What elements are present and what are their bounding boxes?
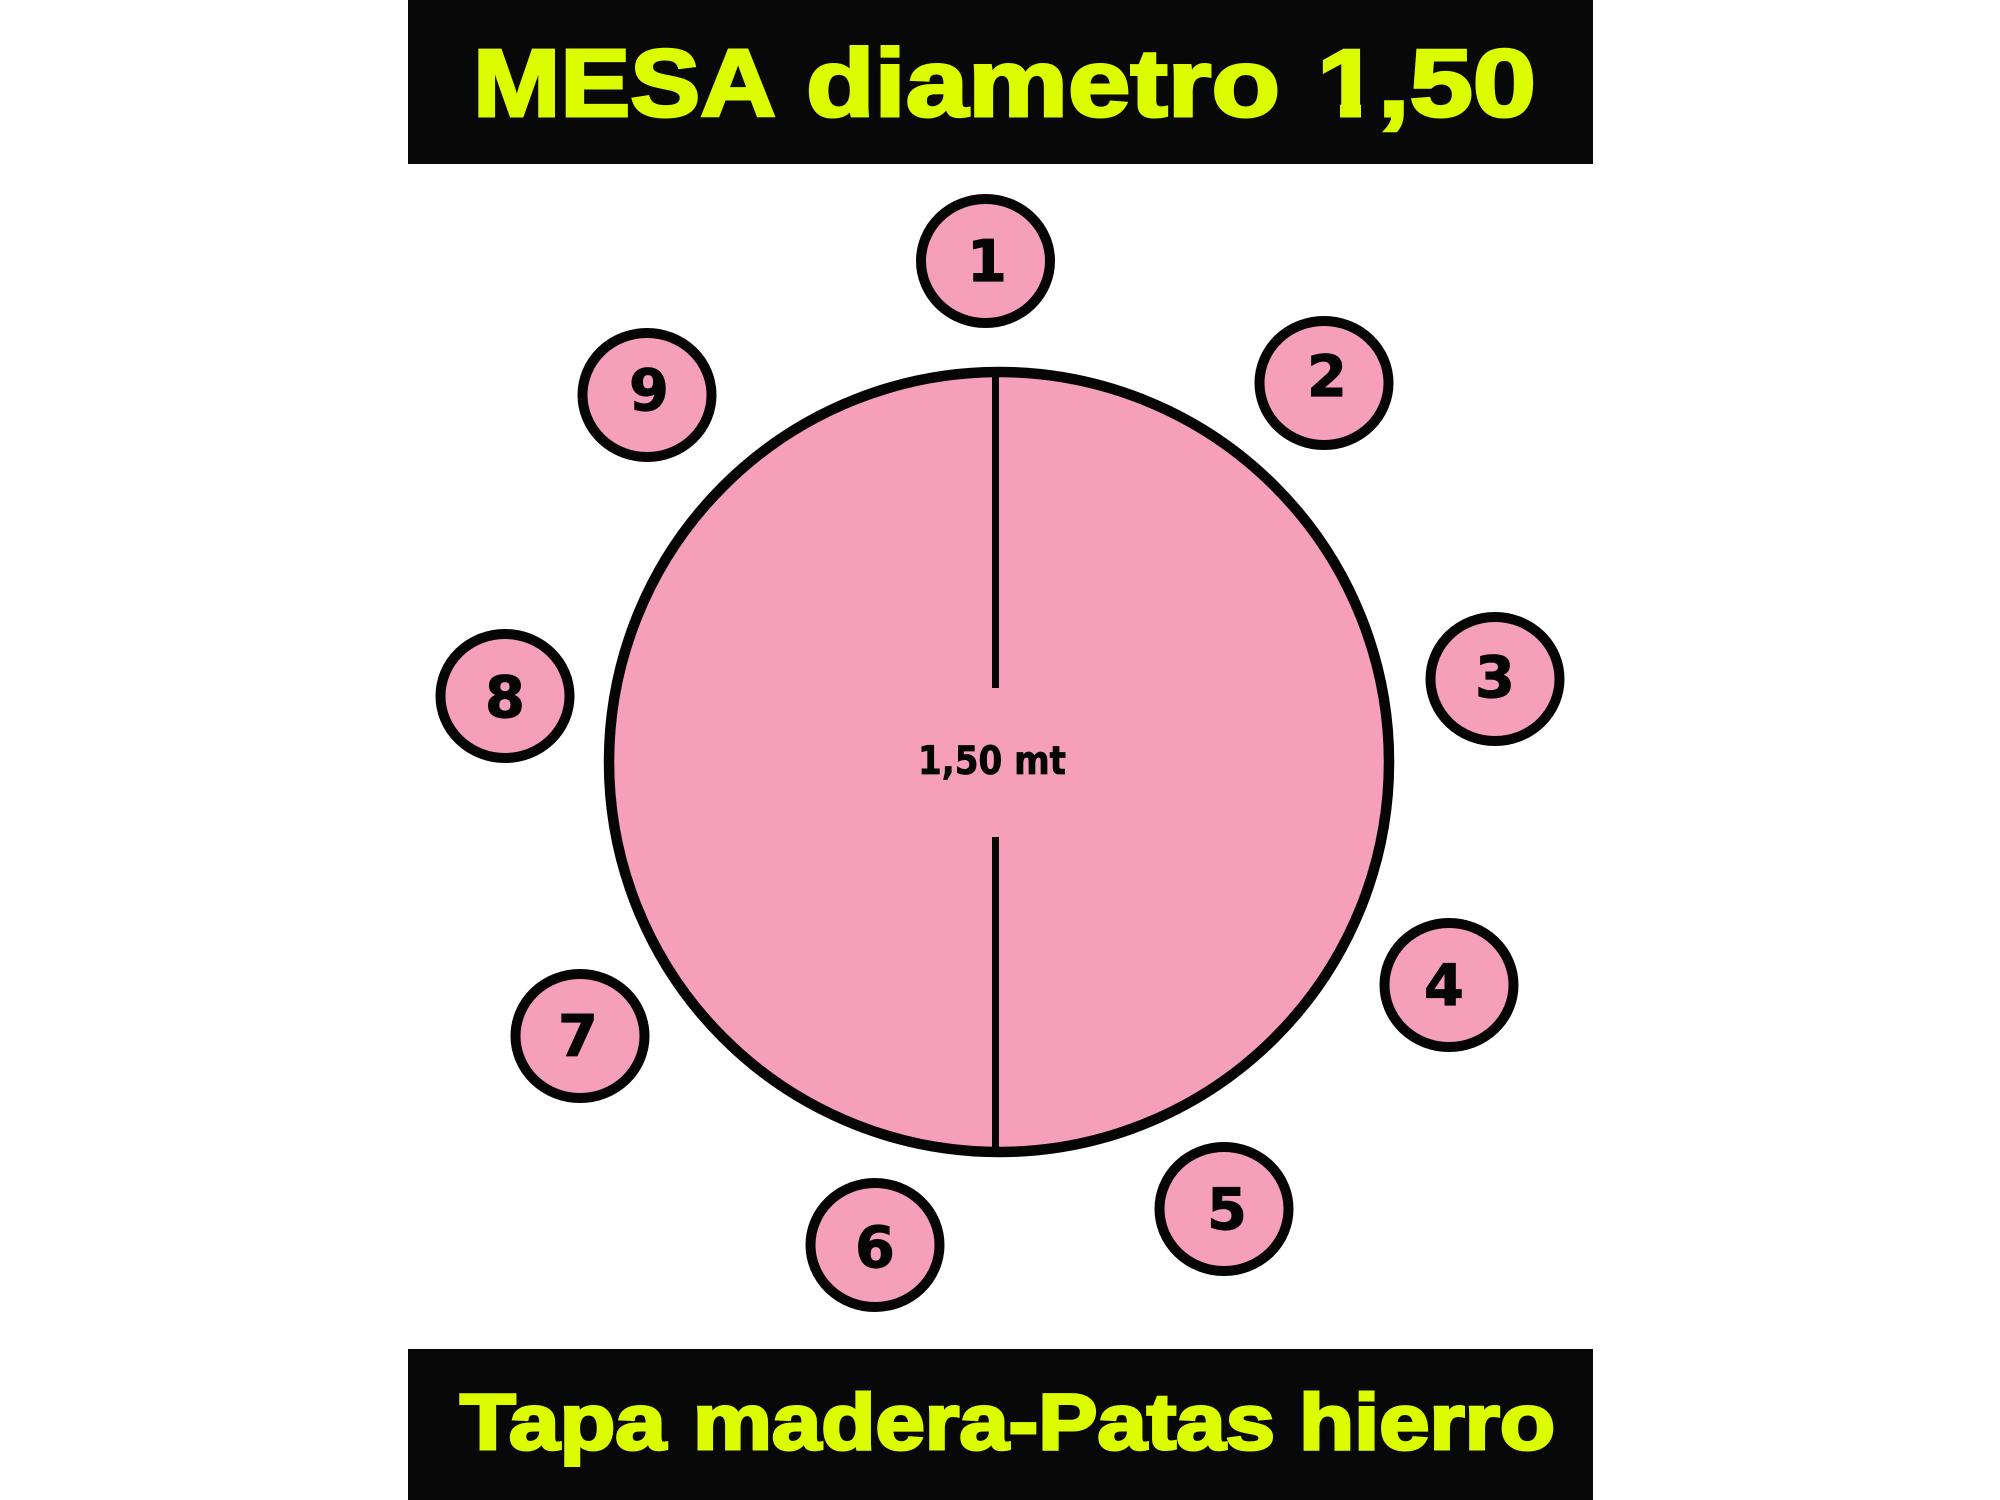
seat 2: 2 [1307,344,1347,410]
seat 7: 7 [558,1004,598,1070]
title banner [408,0,1593,164]
seat 7 [516,974,644,1098]
seat 5: 5 [1207,1177,1247,1243]
seat 9: 9 [629,358,669,424]
title text [473,30,1536,137]
footer text: hierro [1299,1377,1555,1466]
seat 1: 1 [967,229,1007,295]
seat 4: 4 [1424,953,1464,1019]
seat 8: 8 [485,665,525,731]
title text: ,50 [1378,30,1536,137]
footer banner [408,1349,1593,1500]
footer text: madera-Patas [693,1377,1275,1466]
table: main circle with diameter label [609,372,1389,1152]
seat 6: 6 [855,1215,895,1281]
seat 4 [1384,923,1514,1047]
seat 5 [1160,1147,1288,1271]
title text: 1 [1317,30,1379,137]
seat 1 [921,199,1050,323]
footer text [460,1377,1555,1466]
footer text: Tapa [460,1377,667,1466]
seat 3 [1430,617,1560,741]
title text: diametro [806,30,1280,137]
seat 3: 3 [1475,645,1515,711]
seat 9 [582,333,712,457]
title text: MESA [473,30,776,137]
seat 8 [440,634,570,758]
diameter label: 1,50 mt [918,739,1066,784]
seat 6 [810,1183,940,1307]
seat 2 [1260,321,1388,445]
